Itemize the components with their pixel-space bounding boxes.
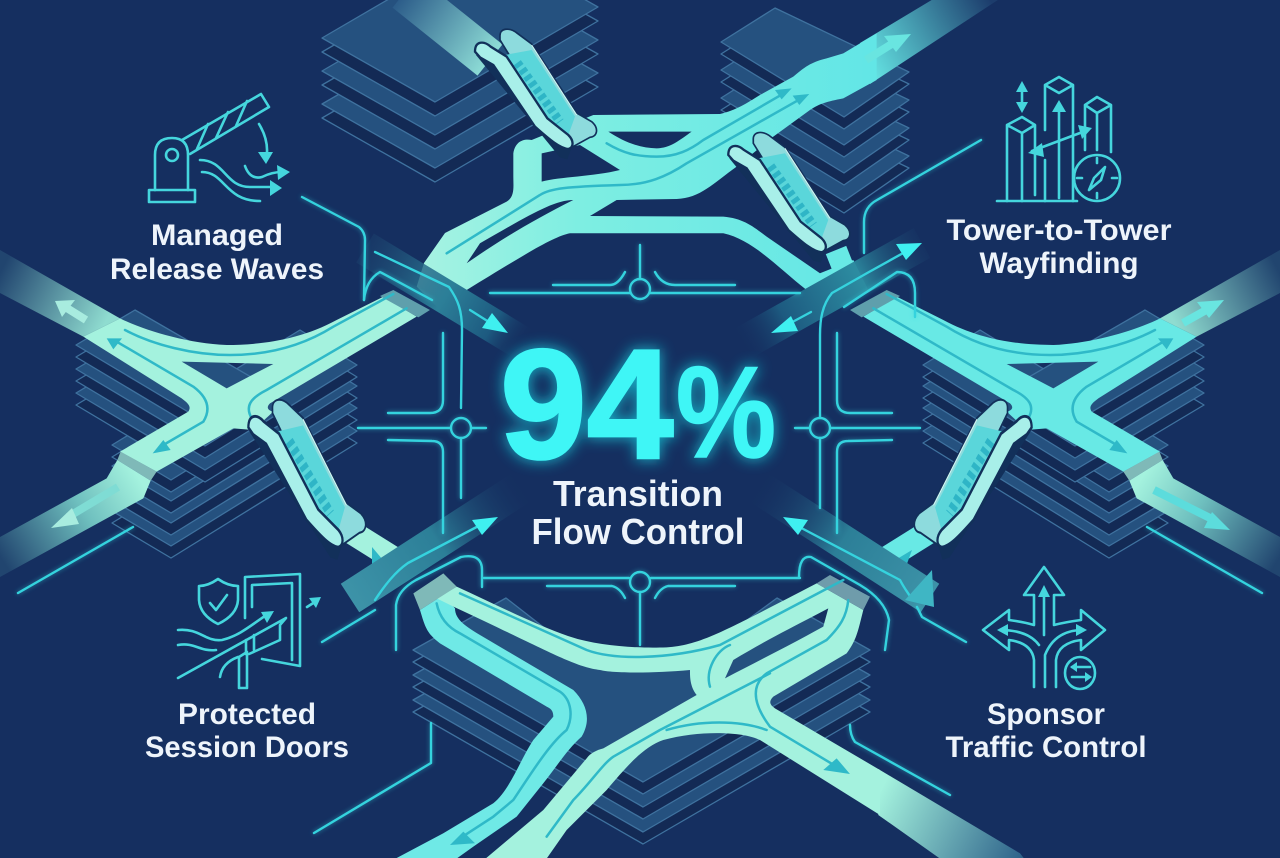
label: Managed Release Waves (110, 219, 324, 286)
road network: left interchange (0, 250, 430, 577)
road network: bottom junction (387, 573, 1033, 858)
road stub: escalator landing, left (340, 525, 412, 570)
center metric: 94%: 94 (500, 318, 674, 492)
escalator: right (914, 400, 1032, 560)
label: Protected Session Doors: Protected (178, 698, 316, 731)
center metric glow (500, 318, 776, 492)
label: Managed Release Waves: Managed (151, 219, 283, 252)
bridge: bottom left (350, 485, 525, 600)
icon: branching sponsor traffic arrows (983, 567, 1105, 689)
label: Sponsor Traffic Control: Traffic Control (946, 731, 1146, 764)
bridge: top right (740, 243, 922, 417)
road stub: escalator landing, right (868, 525, 940, 570)
label: Tower-to-Tower Wayfinding: Wayfinding (980, 247, 1138, 280)
flow line glow (18, 140, 1262, 833)
stack: bottom tower (413, 598, 870, 844)
ghost road ends: top (405, 0, 1010, 84)
label: Tower-to-Tower Wayfinding: Tower-to-Tower (946, 214, 1172, 247)
label: Managed Release Waves: Release Waves (110, 253, 324, 286)
center metric glow: % (676, 339, 776, 485)
bridge: bottom right (755, 485, 934, 607)
flow lines and nodes (18, 140, 1262, 833)
arrow: left landing (372, 547, 388, 566)
center label (532, 473, 744, 552)
stack: top right tower (721, 8, 909, 213)
label: Sponsor Traffic Control: Sponsor (987, 698, 1105, 731)
stack: top left tower (322, 0, 598, 182)
label: Tower-to-Tower Wayfinding (946, 214, 1172, 280)
road stub: escalator landing, top right (836, 250, 852, 290)
stack: right tower (923, 310, 1204, 558)
escalator: left (248, 400, 366, 560)
center metric glow: 94 (500, 318, 674, 492)
escalator: top right (728, 132, 850, 263)
icon: towers and compass (997, 77, 1120, 201)
road arrows on ghost ends (51, 34, 1230, 530)
icon: shield and session door (178, 574, 321, 688)
label: Protected Session Doors: Session Doors (145, 731, 349, 764)
center label: Flow Control (532, 511, 744, 552)
road network: top junction (417, 33, 877, 310)
bridge: top left (365, 248, 525, 408)
icon: barrier gate with release waves (149, 94, 290, 202)
center label: Transition (553, 473, 723, 514)
arrow: right landing (892, 550, 912, 572)
label: Sponsor Traffic Control (946, 698, 1146, 764)
stack: left tower (76, 310, 357, 558)
center metric: 94% (500, 318, 776, 492)
escalator: top left (475, 29, 597, 159)
label: Protected Session Doors (145, 698, 349, 764)
center metric: 94%: % (676, 339, 776, 485)
road network: right interchange (850, 250, 1280, 577)
